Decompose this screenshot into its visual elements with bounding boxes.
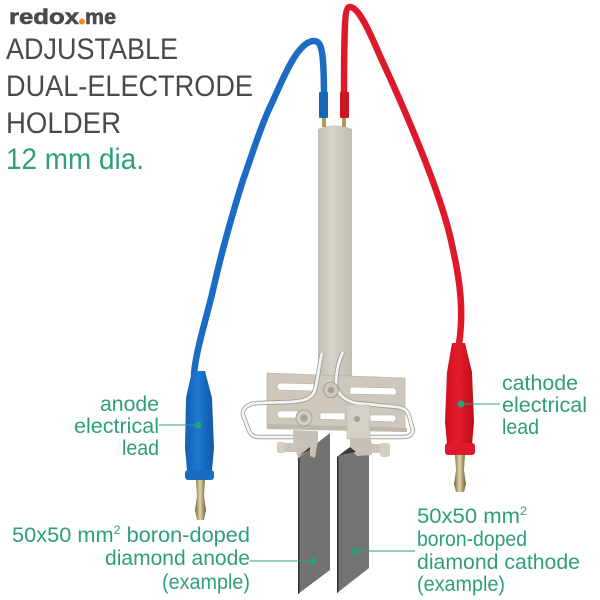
- label: diamond anode: 2: [114, 523, 121, 537]
- label: diamond anode: boron-doped: [121, 524, 250, 547]
- blue cable: [194, 41, 328, 374]
- logo: redox.me: me: [85, 5, 116, 29]
- label: diamond cathode: 50x50 mm: [417, 505, 515, 528]
- label: cathode electrical lead: [458, 372, 587, 439]
- label: cathode electrical lead: electrical: [502, 394, 587, 417]
- label: anode electrical lead: electrical: [74, 415, 159, 438]
- label: diamond anode: (example): [162, 571, 250, 594]
- label: anode electrical lead: [74, 393, 202, 460]
- label: cathode electrical lead: cathode: [502, 372, 578, 395]
- right clamp block: [347, 405, 370, 439]
- title: DUAL-ELECTRODE: [6, 70, 253, 103]
- blue banana plug: [185, 371, 214, 520]
- label: diamond anode: diamond anode: [105, 547, 250, 570]
- label: cathode electrical lead: lead: [502, 416, 539, 439]
- wire loops: [243, 353, 322, 437]
- title: HOLDER: [6, 107, 121, 140]
- holder column: [318, 126, 352, 380]
- title: ADJUSTABLE: [6, 33, 178, 66]
- label: anode electrical lead: anode: [100, 393, 159, 416]
- logo: redox.me: redox: [9, 5, 79, 29]
- left jaw: [293, 430, 318, 458]
- centre screw: [324, 382, 338, 398]
- red cable: [340, 7, 461, 344]
- label: diamond cathode: diamond cathode: [417, 551, 580, 574]
- title: 12 mm dia.: [6, 143, 144, 176]
- label: diamond cathode: [352, 504, 580, 596]
- lower rail: [267, 424, 407, 432]
- slotted mounting plate: [267, 373, 405, 430]
- logo: redox.me: [9, 5, 116, 29]
- diamond anode plate: [298, 433, 330, 594]
- label: anode electrical lead: lead: [122, 437, 159, 460]
- label: diamond cathode: 2: [520, 504, 527, 518]
- label: diamond cathode: boron-doped: [417, 528, 527, 551]
- title: [6, 33, 253, 176]
- label: diamond anode: [12, 523, 316, 594]
- red banana plug: [445, 343, 475, 492]
- left screw: [296, 410, 312, 426]
- right jaw: [350, 438, 372, 456]
- label: diamond anode: 50x50 mm: [12, 524, 110, 547]
- diamond cathode plate: [337, 433, 369, 593]
- label: diamond cathode: (example): [417, 573, 505, 596]
- adjustable holder clamp assembly: [243, 352, 413, 458]
